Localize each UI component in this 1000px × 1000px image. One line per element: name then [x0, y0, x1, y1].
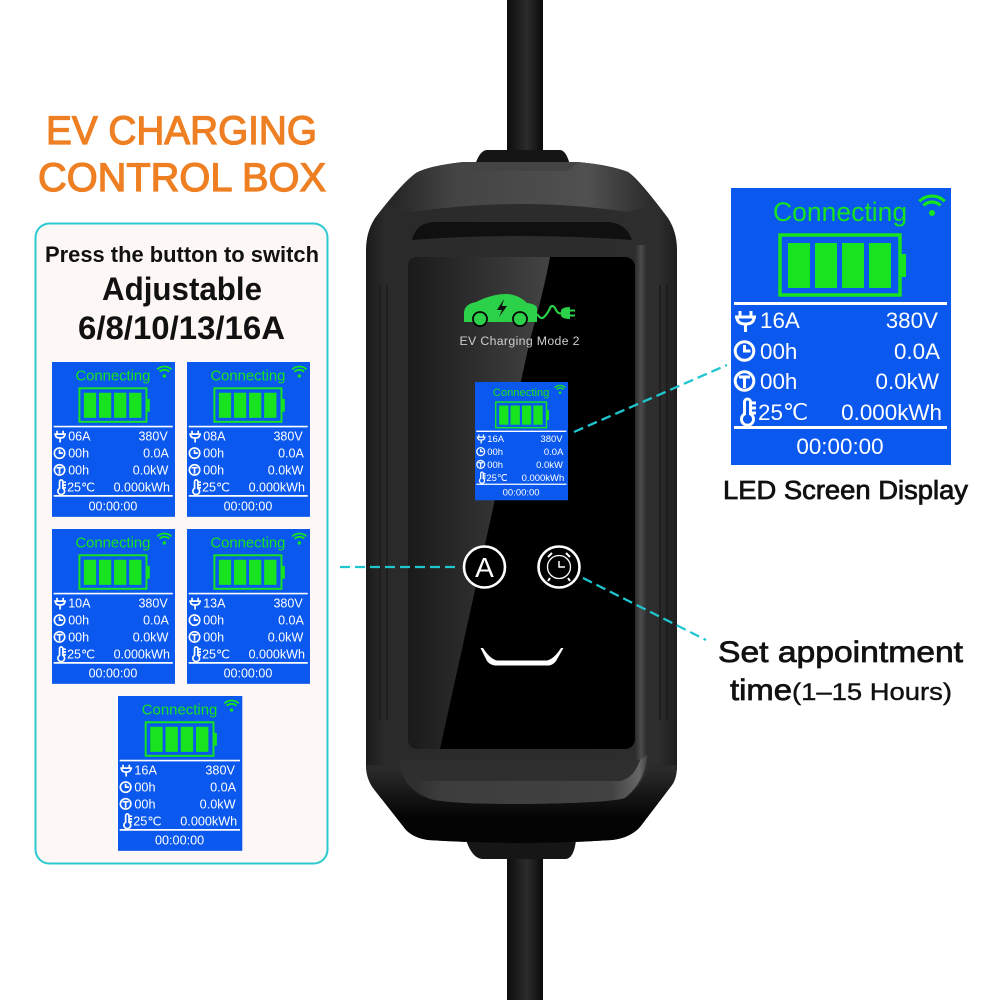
screen: 08A: Connecting — [210, 368, 285, 384]
screen: 13A: 380V — [273, 596, 303, 610]
screen: 10A: 25℃ — [67, 648, 95, 662]
callout line: screen — [574, 365, 727, 432]
top cap — [475, 150, 570, 165]
screen: 13A: 13A — [203, 596, 226, 610]
screen: 13A: 00h — [203, 614, 224, 628]
appointment label: time — [730, 674, 792, 707]
screen: 16A: 00:00:00 — [155, 834, 204, 848]
screen: 10A: 0.000kWh — [114, 648, 170, 662]
smile light bar — [480, 648, 564, 666]
readings: 00h — [760, 369, 797, 394]
screen: 13A: 0.000kWh — [249, 648, 305, 662]
bottom cap — [466, 840, 576, 859]
screen: 06A: 25℃ — [67, 481, 95, 495]
status heading: Connecting — [773, 197, 907, 227]
screen: 10A: Connecting — [75, 535, 150, 551]
screen: 06A: 06A — [68, 429, 91, 443]
panel heading: 6/8/10/13/16A — [78, 310, 285, 346]
screen: 16A: Connecting — [142, 703, 217, 718]
screen: 13A: 0.0A — [278, 614, 304, 628]
screen: 16A: 380V — [205, 763, 236, 777]
device screen: 0.000kWh — [522, 473, 564, 484]
device screen: 0.0kW — [536, 460, 563, 471]
screen: 06A: 00:00:00 — [89, 500, 137, 514]
device screen: Connecting — [493, 387, 549, 399]
top cap lip — [463, 162, 578, 171]
screen: 10A: 00h — [68, 614, 89, 628]
screen: 08A: 25℃ — [202, 481, 230, 495]
screen: 08A: 0.000kWh — [249, 481, 305, 495]
title: CONTROL BOX — [38, 156, 326, 200]
screen: 06A: 00h — [68, 447, 89, 461]
lower bezel band — [407, 755, 647, 804]
button: A — [464, 546, 505, 588]
screen: 16A: 0.0A — [210, 781, 237, 795]
callout line: current button — [340, 566, 458, 568]
screen: 13A: 00:00:00 — [224, 667, 272, 681]
device screen: 380V — [540, 434, 563, 445]
screen: 13A: 25℃ — [202, 648, 230, 662]
panel: adjustable current — [36, 224, 328, 864]
screen: 16A: 25℃ — [133, 815, 162, 829]
screen: 13A: 00h — [203, 630, 224, 644]
screen: 06A: 380V — [138, 429, 168, 443]
lower chin — [366, 765, 677, 843]
screen: 10A: 380V — [138, 596, 168, 610]
timer: 00:00:00 — [796, 434, 884, 459]
appointment label: (1–15 Hours) — [792, 679, 952, 706]
screen: 16A: 0.0kW — [200, 797, 236, 811]
readings: 25℃ — [758, 400, 808, 425]
device screen: 16A — [487, 434, 505, 445]
screen caption: LED Screen Display — [723, 477, 968, 505]
large LCD screen — [731, 188, 951, 465]
button: alarm clock — [538, 546, 580, 588]
side ridges — [380, 285, 667, 720]
title — [38, 109, 326, 200]
readings: 380V — [886, 308, 938, 333]
upper slit — [412, 222, 632, 240]
screen: 08A — [187, 362, 310, 517]
car logo — [464, 294, 575, 326]
screen: 08A: 00:00:00 — [224, 500, 272, 514]
control box device — [366, 0, 677, 1000]
callout line: appointment button — [583, 578, 706, 640]
device screen: 00h — [487, 447, 503, 458]
icon: battery — [780, 235, 906, 295]
icon: wifi — [919, 196, 945, 216]
screen: 16A — [118, 696, 242, 851]
glass sheen — [408, 257, 550, 749]
screen: 16A: 00h — [134, 781, 155, 795]
screen: 08A: 380V — [273, 429, 303, 443]
screen: 10A: 00h — [68, 630, 89, 644]
screen: 06A: Connecting — [75, 368, 150, 384]
upper shoulder highlight — [388, 162, 655, 212]
appointment label — [718, 636, 964, 707]
screen: 13A: 0.0kW — [268, 630, 303, 644]
device screen: 00:00:00 — [503, 488, 540, 499]
readings: 0.0kW — [876, 369, 940, 394]
logo caption: EV Charging Mode 2 — [460, 334, 580, 348]
readings: 16A — [760, 308, 800, 333]
enclosure — [366, 162, 677, 843]
screen: 13A: Connecting — [210, 535, 285, 551]
screen: 06A: 0.000kWh — [114, 481, 170, 495]
screen: 16A: 0.000kWh — [180, 815, 237, 829]
screen: 10A: 10A — [68, 596, 91, 610]
screen: 10A: 00:00:00 — [89, 667, 137, 681]
screen: 08A: 0.0kW — [268, 463, 303, 477]
readings: 0.000kWh — [841, 400, 942, 425]
readings: 0.0A — [894, 339, 940, 364]
screen: 06A: 0.0A — [143, 447, 169, 461]
readings: 00h — [760, 339, 797, 364]
screen: 08A: 00h — [203, 447, 224, 461]
right bezel highlight — [635, 245, 647, 765]
title: EV CHARGING — [46, 109, 317, 153]
screen: 13A — [187, 529, 310, 684]
screen: 16A: 00h — [134, 797, 155, 811]
panel heading: Adjustable — [102, 271, 262, 307]
screen: 08A: 0.0A — [278, 447, 304, 461]
readings — [735, 308, 942, 425]
lower bezel face — [400, 760, 648, 804]
device screen: 25℃ — [486, 473, 508, 484]
screen: 10A — [52, 529, 175, 684]
screen: 08A: 08A — [203, 429, 226, 443]
bottom cable — [507, 855, 543, 1000]
screen: 06A: 0.0kW — [133, 463, 168, 477]
front glass — [408, 257, 635, 749]
screen: 06A: 00h — [68, 463, 89, 477]
screen: 16A: 16A — [134, 763, 157, 777]
screen: 06A — [52, 362, 175, 517]
appointment label: Set appointment — [718, 636, 964, 669]
device screen: 0.0A — [544, 447, 564, 458]
panel heading — [45, 242, 319, 346]
device screen: 00h — [487, 460, 503, 471]
screen: 10A: 0.0kW — [133, 630, 168, 644]
screen: 10A: 0.0A — [143, 614, 169, 628]
top cable — [507, 0, 543, 155]
button: A: A — [475, 552, 494, 583]
screen: 08A: 00h — [203, 463, 224, 477]
device screen — [475, 382, 568, 500]
panel heading: Press the button to switch — [45, 242, 319, 267]
